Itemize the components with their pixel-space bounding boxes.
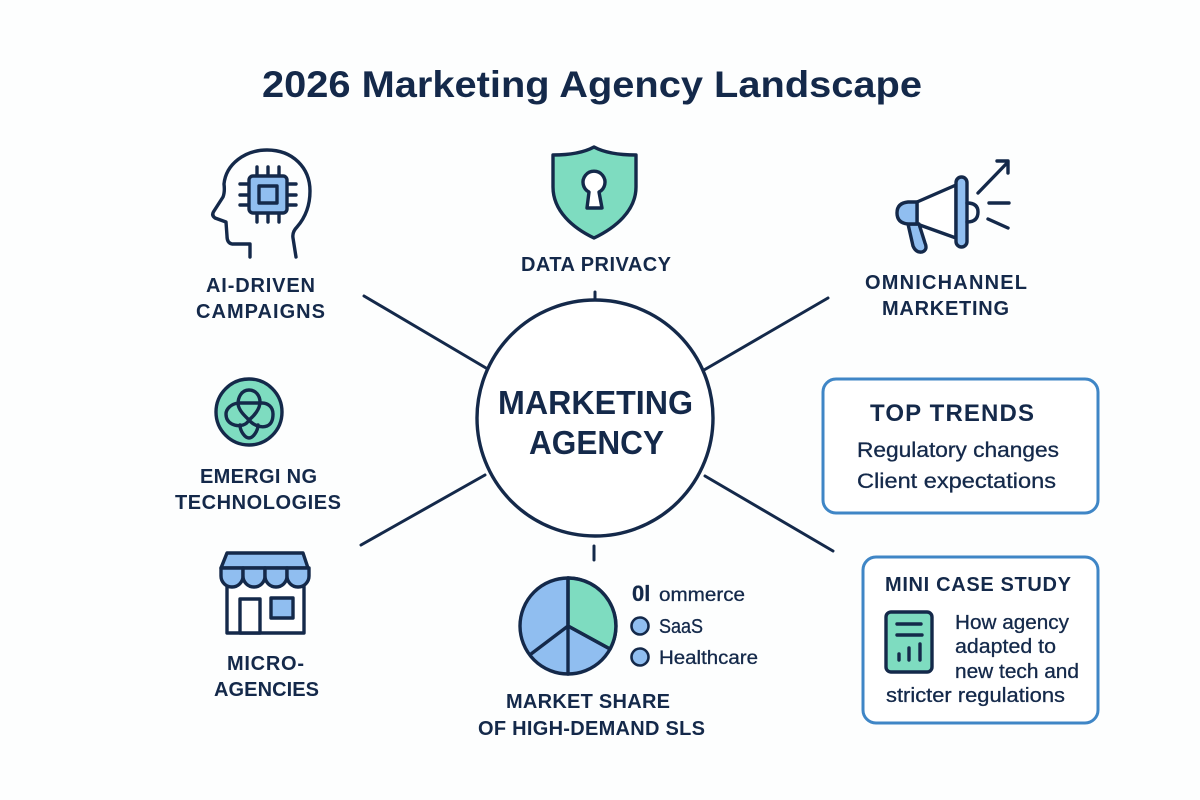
icon: megaphone: [897, 161, 1009, 252]
label: market share: [478, 691, 705, 740]
legend: SaaS: [659, 616, 703, 638]
label: emerging technologies: TECHNOLOGIES: [175, 492, 341, 514]
icon: storefront: [221, 553, 309, 633]
icon: orbit knot: [216, 379, 282, 445]
case study text: adapted to: [955, 636, 1056, 658]
legend: Healthcare: [659, 648, 758, 669]
label: emerging technologies: [175, 466, 341, 514]
label: AI-driven campaigns: CAMPAIGNS: [196, 301, 325, 323]
label: omnichannel marketing: MARKETING: [882, 298, 1009, 320]
node: omnichannel marketing: [865, 161, 1027, 320]
case study text: How agency: [955, 612, 1069, 634]
pie chart: [520, 578, 616, 674]
icon: report with bars: [886, 612, 932, 672]
label: emerging technologies: EMERGI NG: [200, 466, 317, 488]
central hub: marketing agency: MARKETING: [498, 384, 693, 421]
label: micro-agencies: [214, 653, 319, 701]
trend list: [857, 439, 1059, 493]
central hub: marketing agency: [477, 300, 713, 536]
title: 2026 Marketing Agency Landscape: [262, 64, 922, 105]
node: market share: [478, 578, 758, 740]
node: emerging technologies: [175, 379, 341, 514]
icon: head with chip: [213, 150, 310, 257]
panel: top trends: [823, 379, 1098, 513]
label: market share: OF HIGH-DEMAND SLS: [478, 718, 705, 740]
node: data privacy: [521, 147, 672, 276]
label: micro-agencies: AGENCIES: [214, 679, 319, 701]
label: AI-driven campaigns: AI-DRIVEN: [206, 275, 315, 297]
node: AI-driven campaigns: [196, 150, 325, 323]
label: micro-agencies: MICRO-: [227, 653, 304, 675]
label: AI-driven campaigns: [196, 275, 325, 323]
case study text: stricter regulations: [886, 685, 1065, 707]
label: omnichannel marketing: OMNICHANNEL: [865, 272, 1027, 294]
legend: 0l: [632, 581, 650, 606]
legend: [632, 581, 758, 669]
icon: shield with keyhole: [553, 147, 636, 238]
trend list: Regulatory changes: [857, 439, 1059, 462]
central hub: marketing agency: AGENCY: [529, 424, 664, 461]
case study text: new tech and: [955, 661, 1079, 683]
label: data privacy: DATA PRIVACY: [521, 254, 672, 276]
legend: ommerce: [659, 585, 745, 606]
heading: top trends: TOP TRENDS: [870, 400, 1034, 427]
connector lines: [361, 292, 833, 560]
heading: mini case study: MINI CASE STUDY: [885, 574, 1072, 596]
label: omnichannel marketing: [865, 272, 1027, 320]
case study text: [886, 612, 1079, 707]
label: market share: MARKET SHARE: [506, 691, 670, 713]
panel: mini case study: [863, 557, 1098, 723]
trend list: Client expectations: [857, 470, 1056, 493]
node: micro-agencies: [214, 553, 319, 701]
